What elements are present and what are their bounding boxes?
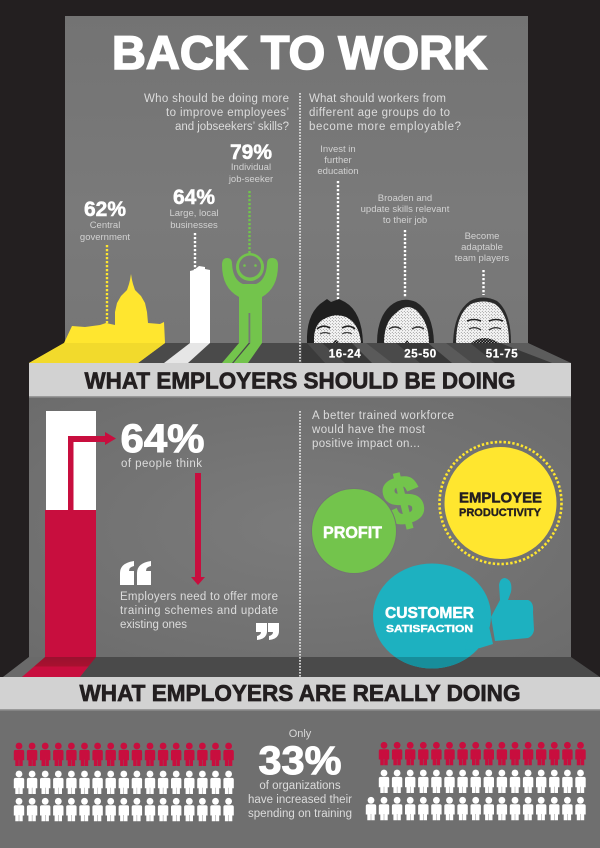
arrow: down to quote bbox=[191, 473, 205, 585]
stat: broaden and update skills bbox=[361, 193, 450, 298]
stat: 64 percent of people think: of people think bbox=[121, 458, 202, 470]
pictogram: right group of people bbox=[366, 742, 586, 820]
question: who should be doing more: Who should be doing more bbox=[144, 93, 289, 105]
heading band: what employers are really doing: WHAT EMPLOYERS ARE REALLY DOING bbox=[80, 680, 520, 706]
title: BACK TO WORK bbox=[112, 26, 487, 79]
icon: young man face, halftone bbox=[307, 299, 363, 343]
stat: 33 percent of organizations: spending on training bbox=[248, 808, 352, 820]
bubble: customer satisfaction: SATISFACTION bbox=[386, 623, 473, 635]
stat: 33 percent of organizations: 33% bbox=[258, 739, 342, 783]
heading band: what employers should be doing: WHAT EMPLOYERS SHOULD BE DOING bbox=[84, 368, 516, 394]
pictogram: left group of people bbox=[14, 743, 234, 821]
text: better trained workforce: would have the most bbox=[311, 424, 426, 436]
question: who should be doing more bbox=[144, 93, 289, 133]
stat: invest in further education bbox=[317, 144, 359, 300]
icon: green person with raised arms bbox=[222, 253, 278, 363]
panel: middle section wall and floor bbox=[3, 398, 600, 677]
stat: become adaptable team players: Become bbox=[465, 231, 499, 242]
stat: 64 percent of people think: 64% bbox=[120, 417, 204, 461]
age labels bbox=[329, 348, 518, 360]
stat: central government 62%: 62% bbox=[84, 198, 126, 221]
icon: yellow capitol building bbox=[29, 274, 165, 363]
stat: 33 percent of organizations: Only bbox=[289, 728, 312, 740]
stat: large local businesses 64%: Large, local bbox=[169, 208, 219, 219]
stat: become adaptable team players: team players bbox=[455, 253, 509, 264]
text: better trained workforce bbox=[311, 410, 454, 450]
bubble: employee productivity: PRODUCTIVITY bbox=[459, 507, 542, 519]
stat: become adaptable team players bbox=[455, 231, 509, 295]
stat: broaden and update skills: update skills relevant bbox=[361, 204, 450, 215]
stat: large local businesses 64%: 64% bbox=[173, 186, 215, 209]
stat: 33 percent of organizations: have increased their bbox=[248, 794, 352, 806]
center dotted divider, middle section bbox=[299, 411, 301, 677]
panel: top section wall and floor bbox=[29, 16, 571, 363]
stat: broaden and update skills: to their job bbox=[383, 215, 427, 226]
icon: older man face, halftone bbox=[453, 298, 511, 343]
stat: central government 62% bbox=[80, 198, 130, 325]
stat: central government 62%: government bbox=[80, 232, 130, 243]
bubble: customer satisfaction: CUSTOMER bbox=[385, 605, 474, 622]
bubble: profit bbox=[311, 460, 430, 574]
question: who should be doing more: to improve employees’ bbox=[166, 107, 289, 119]
bubble: profit: PROFIT bbox=[323, 524, 382, 542]
center dotted divider bbox=[299, 93, 301, 363]
bubble: profit: $ bbox=[376, 460, 430, 540]
icon: woman face, halftone bbox=[377, 300, 434, 343]
stat: individual job-seeker 79%: job-seeker bbox=[228, 174, 273, 185]
question: what should workers do: become more employable? bbox=[309, 121, 461, 133]
heading band: what employers should be doing bbox=[29, 363, 571, 398]
quote text bbox=[120, 591, 278, 631]
age labels: 25-50 bbox=[404, 348, 437, 360]
icon: opening quote mark bbox=[120, 561, 151, 585]
question: what should workers do bbox=[309, 93, 461, 133]
stat: invest in further education: Invest in bbox=[320, 144, 356, 155]
stat: broaden and update skills: Broaden and bbox=[378, 193, 432, 204]
question: who should be doing more: and jobseekers’ skills? bbox=[175, 121, 289, 133]
text: better trained workforce: positive impact on... bbox=[312, 438, 420, 450]
heading band: what employers are really doing bbox=[0, 677, 600, 710]
stat: invest in further education: further bbox=[324, 155, 352, 166]
quote text: existing ones bbox=[120, 619, 187, 631]
stat: invest in further education: education bbox=[317, 166, 359, 177]
question: what should workers do: What should workers from bbox=[309, 93, 446, 105]
stat: individual job-seeker 79% bbox=[228, 141, 273, 253]
question: what should workers do: different age groups do to bbox=[309, 107, 450, 119]
age labels: 16-24 bbox=[329, 348, 361, 360]
stat: 33 percent of organizations: of organizations bbox=[259, 780, 341, 792]
text: better trained workforce: A better trained workforce bbox=[312, 410, 454, 422]
age labels: 51-75 bbox=[486, 348, 518, 360]
quote text: training schemes and update bbox=[120, 605, 278, 617]
icon: white office tower bbox=[164, 266, 210, 363]
stat: large local businesses 64% bbox=[169, 186, 219, 270]
stat: individual job-seeker 79%: 79% bbox=[230, 141, 272, 164]
chart: 64 percent column bbox=[22, 411, 96, 677]
bubble: customer satisfaction bbox=[373, 564, 534, 668]
bubble: employee productivity bbox=[440, 442, 562, 564]
stat: individual job-seeker 79%: Individual bbox=[231, 162, 271, 173]
stat: 33 percent of organizations bbox=[248, 728, 352, 820]
arrow: column to 64 percent bbox=[68, 432, 116, 510]
icon: closing quote mark bbox=[256, 623, 279, 640]
stat: central government 62%: Central bbox=[90, 220, 120, 231]
panel: bottom section bbox=[0, 710, 600, 848]
stat: large local businesses 64%: businesses bbox=[170, 220, 218, 231]
stat: become adaptable team players: adaptable bbox=[461, 242, 503, 253]
bubble: employee productivity: EMPLOYEE bbox=[459, 490, 542, 506]
quote text: Employers need to offer more bbox=[120, 591, 278, 603]
